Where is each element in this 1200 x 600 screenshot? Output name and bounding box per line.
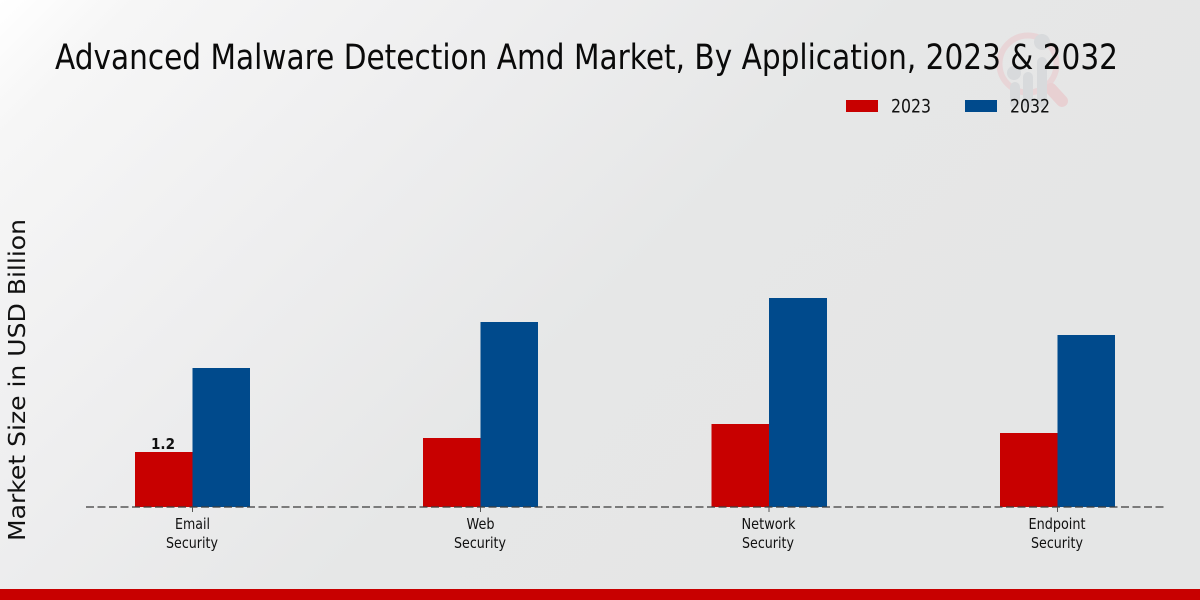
bars: Email Security	[135, 368, 250, 507]
data label: 1.2	[151, 435, 175, 453]
legend label 2032: 2032	[1010, 96, 1050, 118]
axis label: Endpoint Security: Security	[1031, 534, 1083, 552]
legend	[846, 96, 1050, 118]
legend label 2023: 2023	[891, 96, 931, 118]
axis label: Endpoint Security: Endpoint	[1028, 515, 1086, 533]
y axis label: Market Size in USD Billion	[5, 219, 31, 541]
axis label: Network Security: Network	[742, 515, 796, 533]
bar chart	[86, 298, 1164, 552]
axis ticks	[192, 507, 1058, 512]
axis label: Web Security: Web	[466, 515, 494, 533]
axis label: Web Security: Security	[454, 534, 506, 552]
legend swatch 2023	[846, 100, 878, 112]
bars: Web Security	[423, 322, 538, 507]
axis label: Email Security: Email	[175, 515, 210, 533]
icon: watermark magnifier logo	[1000, 34, 1062, 108]
axis label: Network Security: Security	[742, 534, 794, 552]
bars: Endpoint Security	[1000, 335, 1115, 507]
axis label: Email Security: Security	[166, 534, 218, 552]
axis baseline	[86, 506, 1164, 508]
bars: Network Security	[712, 298, 827, 507]
footer bar	[0, 589, 1200, 600]
legend swatch 2032	[965, 100, 997, 112]
